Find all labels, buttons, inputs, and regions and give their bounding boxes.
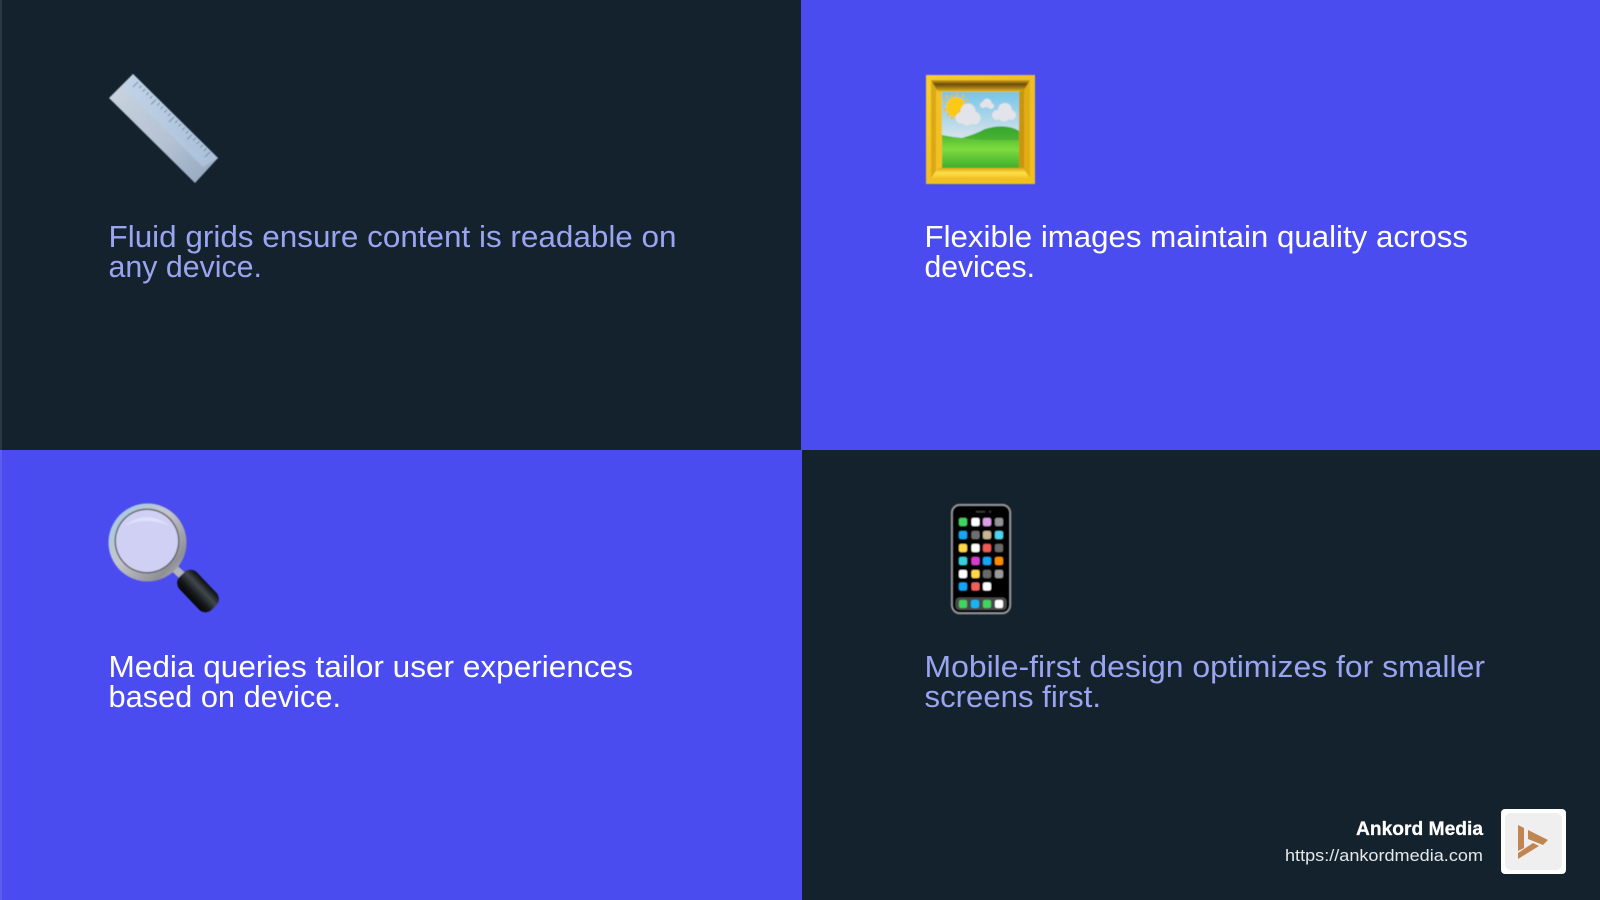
panel: mobile-first <box>802 450 1600 900</box>
icon: smartphone <box>952 505 1010 613</box>
footer: brand <box>1285 809 1566 874</box>
text: media queries: based on device. <box>108 679 341 714</box>
panel: fluid grids <box>0 0 801 450</box>
text: mobile-first: Mobile-first design optimizes for smaller <box>924 649 1485 684</box>
text: mobile-first <box>924 649 1485 714</box>
text: fluid grids <box>108 219 676 284</box>
text: media queries: Media queries tailor user experiences <box>108 649 633 684</box>
panel: flexible images <box>801 0 1600 450</box>
logo <box>1501 809 1566 874</box>
text: flexible images: devices. <box>924 249 1035 284</box>
icon: magnifying glass <box>108 504 223 616</box>
text: fluid grids: Fluid grids ensure content is readable on <box>108 219 676 254</box>
text: media queries <box>108 649 633 714</box>
brand url: https://ankordmedia.com <box>1285 846 1483 865</box>
text: mobile-first: screens first. <box>924 679 1101 714</box>
text: flexible images: Flexible images maintain quality across <box>924 219 1468 254</box>
icon: framed picture <box>926 75 1035 184</box>
icon: ruler <box>109 74 218 183</box>
brand name: Ankord Media <box>1356 819 1483 840</box>
text: fluid grids: any device. <box>108 249 262 284</box>
panel: media queries <box>0 450 802 900</box>
text: flexible images <box>924 219 1468 284</box>
